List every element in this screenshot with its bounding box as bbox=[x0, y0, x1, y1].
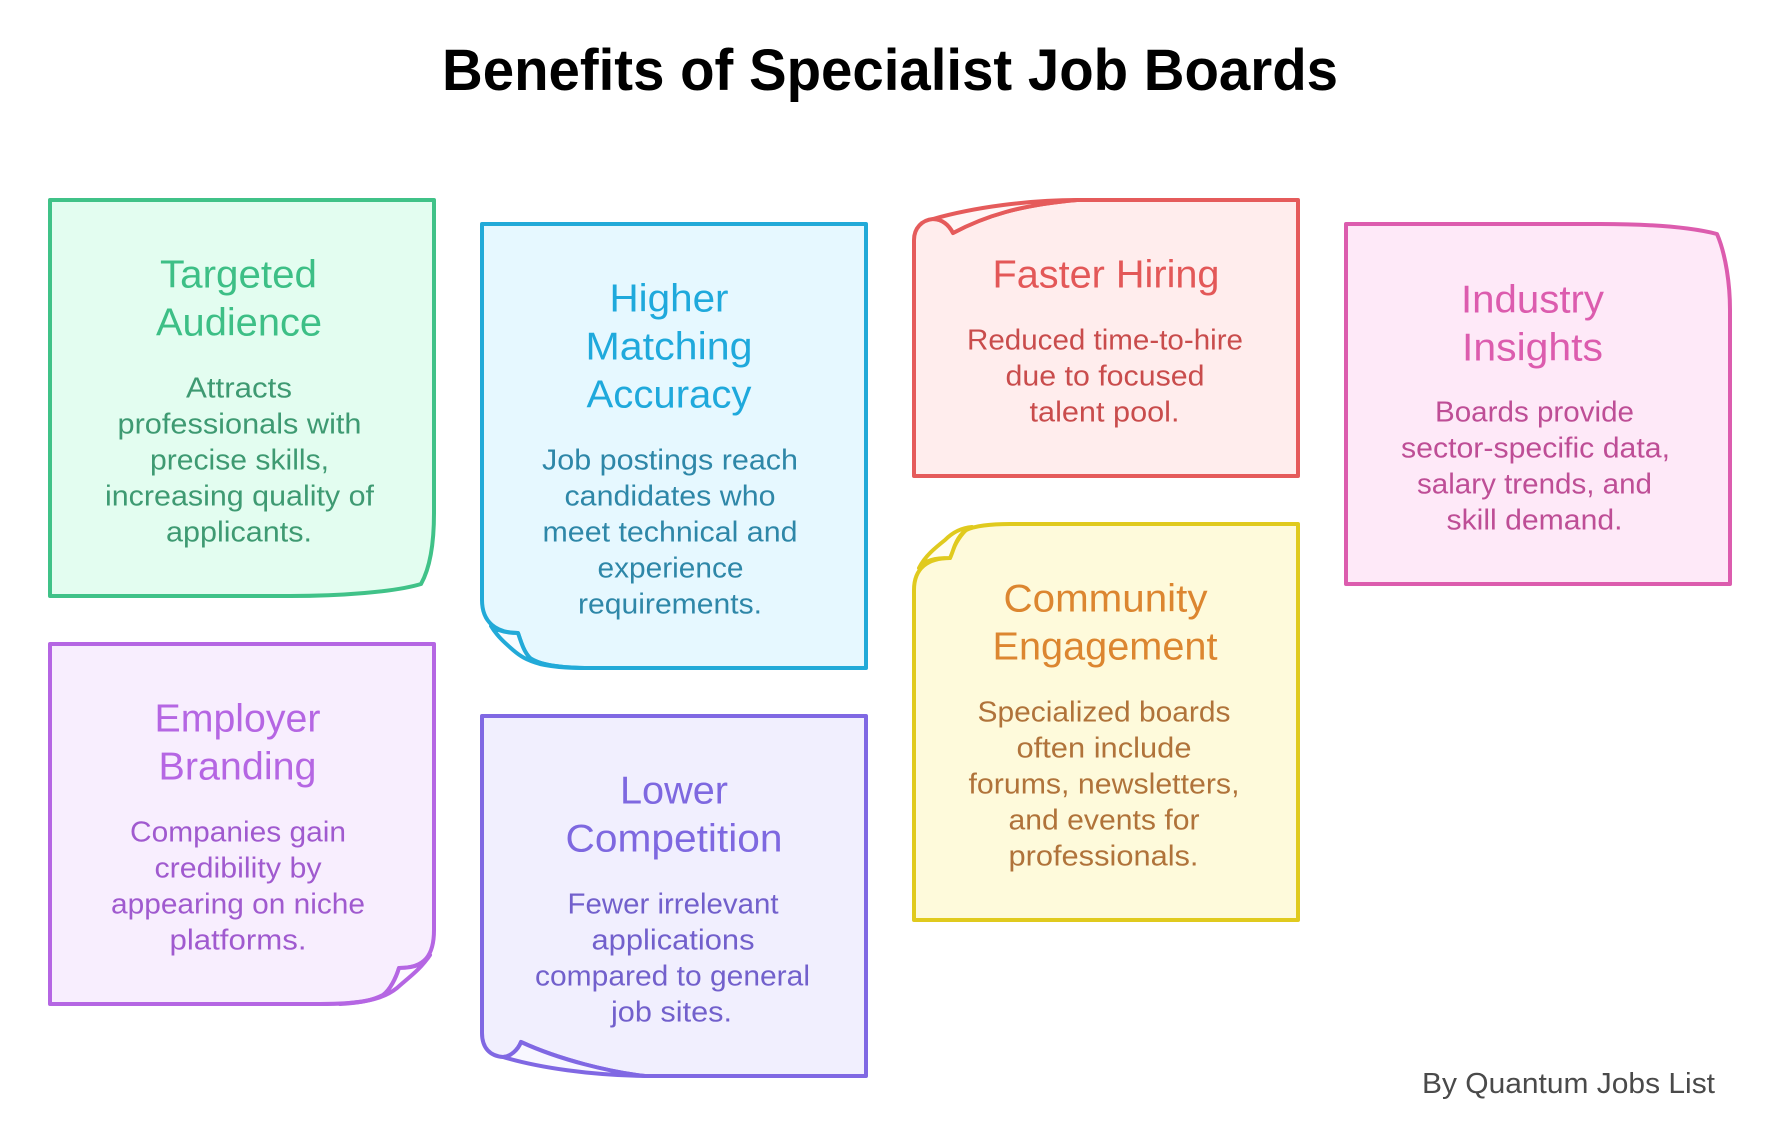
page curl: bottom-right bbox=[340, 955, 430, 1004]
panel: Industry Insights bbox=[1346, 224, 1730, 584]
body text: Community Engagement: professionals. bbox=[1008, 841, 1198, 873]
panel: Employer Branding bbox=[50, 644, 434, 1004]
body text: Lower Competition bbox=[535, 889, 810, 1029]
note shape: red with top-left page curl bbox=[914, 200, 1298, 476]
body text: Faster Hiring: talent pool. bbox=[1030, 397, 1180, 429]
heading: Faster Hiring: Faster Hiring bbox=[992, 254, 1220, 297]
note shape: blue with bottom-left page curl bbox=[482, 224, 866, 668]
heading: Lower Competition bbox=[566, 770, 782, 861]
body text: Lower Competition: Fewer irrelevant bbox=[568, 889, 778, 921]
panel: Higher Matching Accuracy bbox=[482, 224, 866, 668]
heading: Community Engagement bbox=[992, 578, 1218, 669]
body text: Targeted Audience: Attracts bbox=[186, 373, 292, 405]
body text: Higher Matching Accuracy: Job postings reach bbox=[542, 445, 798, 477]
body text: Industry Insights bbox=[1401, 397, 1670, 537]
note shape: green bbox=[50, 200, 434, 596]
heading: Community Engagement: Community bbox=[1004, 578, 1208, 621]
heading: Targeted Audience: Targeted bbox=[160, 254, 317, 297]
body text: Faster Hiring: due to focused bbox=[1006, 361, 1204, 393]
heading: Targeted Audience bbox=[156, 254, 322, 345]
body text: Community Engagement: and events for bbox=[1008, 805, 1200, 837]
heading: Employer Branding: Employer bbox=[154, 698, 321, 741]
body text: Industry Insights: skill demand. bbox=[1446, 505, 1622, 537]
body text: Higher Matching Accuracy: requirements. bbox=[578, 589, 762, 621]
note shape: pink bbox=[1346, 224, 1730, 584]
body text: Employer Branding: platforms. bbox=[170, 925, 306, 957]
body text: Community Engagement: Specialized boards bbox=[978, 697, 1230, 729]
heading: Higher Matching Accuracy bbox=[586, 278, 752, 417]
body text: Higher Matching Accuracy bbox=[542, 445, 798, 621]
body text: Lower Competition: job sites. bbox=[610, 997, 732, 1029]
heading: Community Engagement: Engagement bbox=[992, 626, 1218, 669]
body text: Employer Branding: credibility by bbox=[154, 853, 322, 885]
note shape: violet with bottom-left page curl bbox=[482, 716, 866, 1076]
heading: Employer Branding: Branding bbox=[158, 746, 316, 789]
body text: Community Engagement: forums, newsletters, bbox=[968, 769, 1240, 801]
body text: Higher Matching Accuracy: experience bbox=[598, 553, 744, 585]
note shape: purple with bottom-right page curl bbox=[50, 644, 434, 1004]
body text: Targeted Audience: precise skills, bbox=[150, 445, 329, 477]
body text: Faster Hiring bbox=[967, 325, 1243, 429]
body text: Employer Branding: Companies gain bbox=[130, 817, 346, 849]
body text: Targeted Audience bbox=[105, 373, 375, 549]
body text: Targeted Audience: applicants. bbox=[166, 517, 312, 549]
heading: Higher Matching Accuracy: Accuracy bbox=[586, 374, 752, 417]
body text: Community Engagement: often include bbox=[1016, 733, 1192, 765]
panel: Community Engagement bbox=[914, 524, 1298, 920]
page curl: bottom-left bbox=[491, 626, 590, 668]
body text: Lower Competition: applications bbox=[592, 925, 754, 957]
body text: Higher Matching Accuracy: meet technical and bbox=[542, 517, 798, 549]
heading: Industry Insights: Insights bbox=[1462, 327, 1603, 370]
note shape: yellow with top-left page curl bbox=[914, 524, 1298, 920]
heading: Higher Matching Accuracy: Matching bbox=[586, 326, 752, 369]
panel: Targeted Audience bbox=[50, 200, 434, 596]
body text: Lower Competition: compared to general bbox=[535, 961, 810, 993]
heading: Employer Branding bbox=[154, 698, 321, 789]
heading: Lower Competition: Competition bbox=[566, 818, 782, 861]
body text: Higher Matching Accuracy: candidates who bbox=[564, 481, 776, 513]
heading: Industry Insights: Industry bbox=[1461, 279, 1605, 322]
heading: Targeted Audience: Audience bbox=[156, 302, 322, 345]
body text: Industry Insights: Boards provide bbox=[1435, 397, 1634, 429]
heading: Higher Matching Accuracy: Higher bbox=[610, 278, 729, 321]
attribution: By Quantum Jobs List bbox=[1422, 1068, 1715, 1100]
title: Benefits of Specialist Job Boards bbox=[442, 38, 1338, 103]
body text: Faster Hiring: Reduced time-to-hire bbox=[967, 325, 1243, 357]
panel: Faster Hiring bbox=[914, 200, 1298, 476]
page curl: bottom-left bbox=[503, 1042, 645, 1076]
heading: Lower Competition: Lower bbox=[620, 770, 728, 813]
body text: Industry Insights: salary trends, and bbox=[1417, 469, 1652, 501]
body text: Industry Insights: sector-specific data, bbox=[1401, 433, 1670, 465]
body text: Targeted Audience: increasing quality of bbox=[105, 481, 375, 513]
body text: Employer Branding bbox=[111, 817, 365, 957]
body text: Employer Branding: appearing on niche bbox=[111, 889, 365, 921]
body text: Community Engagement bbox=[968, 697, 1240, 873]
panel: Lower Competition bbox=[482, 716, 866, 1076]
heading: Industry Insights bbox=[1461, 279, 1605, 370]
page curl: top-left bbox=[933, 200, 1077, 233]
body text: Targeted Audience: professionals with bbox=[118, 409, 362, 441]
page curl: top-left bbox=[919, 527, 972, 568]
